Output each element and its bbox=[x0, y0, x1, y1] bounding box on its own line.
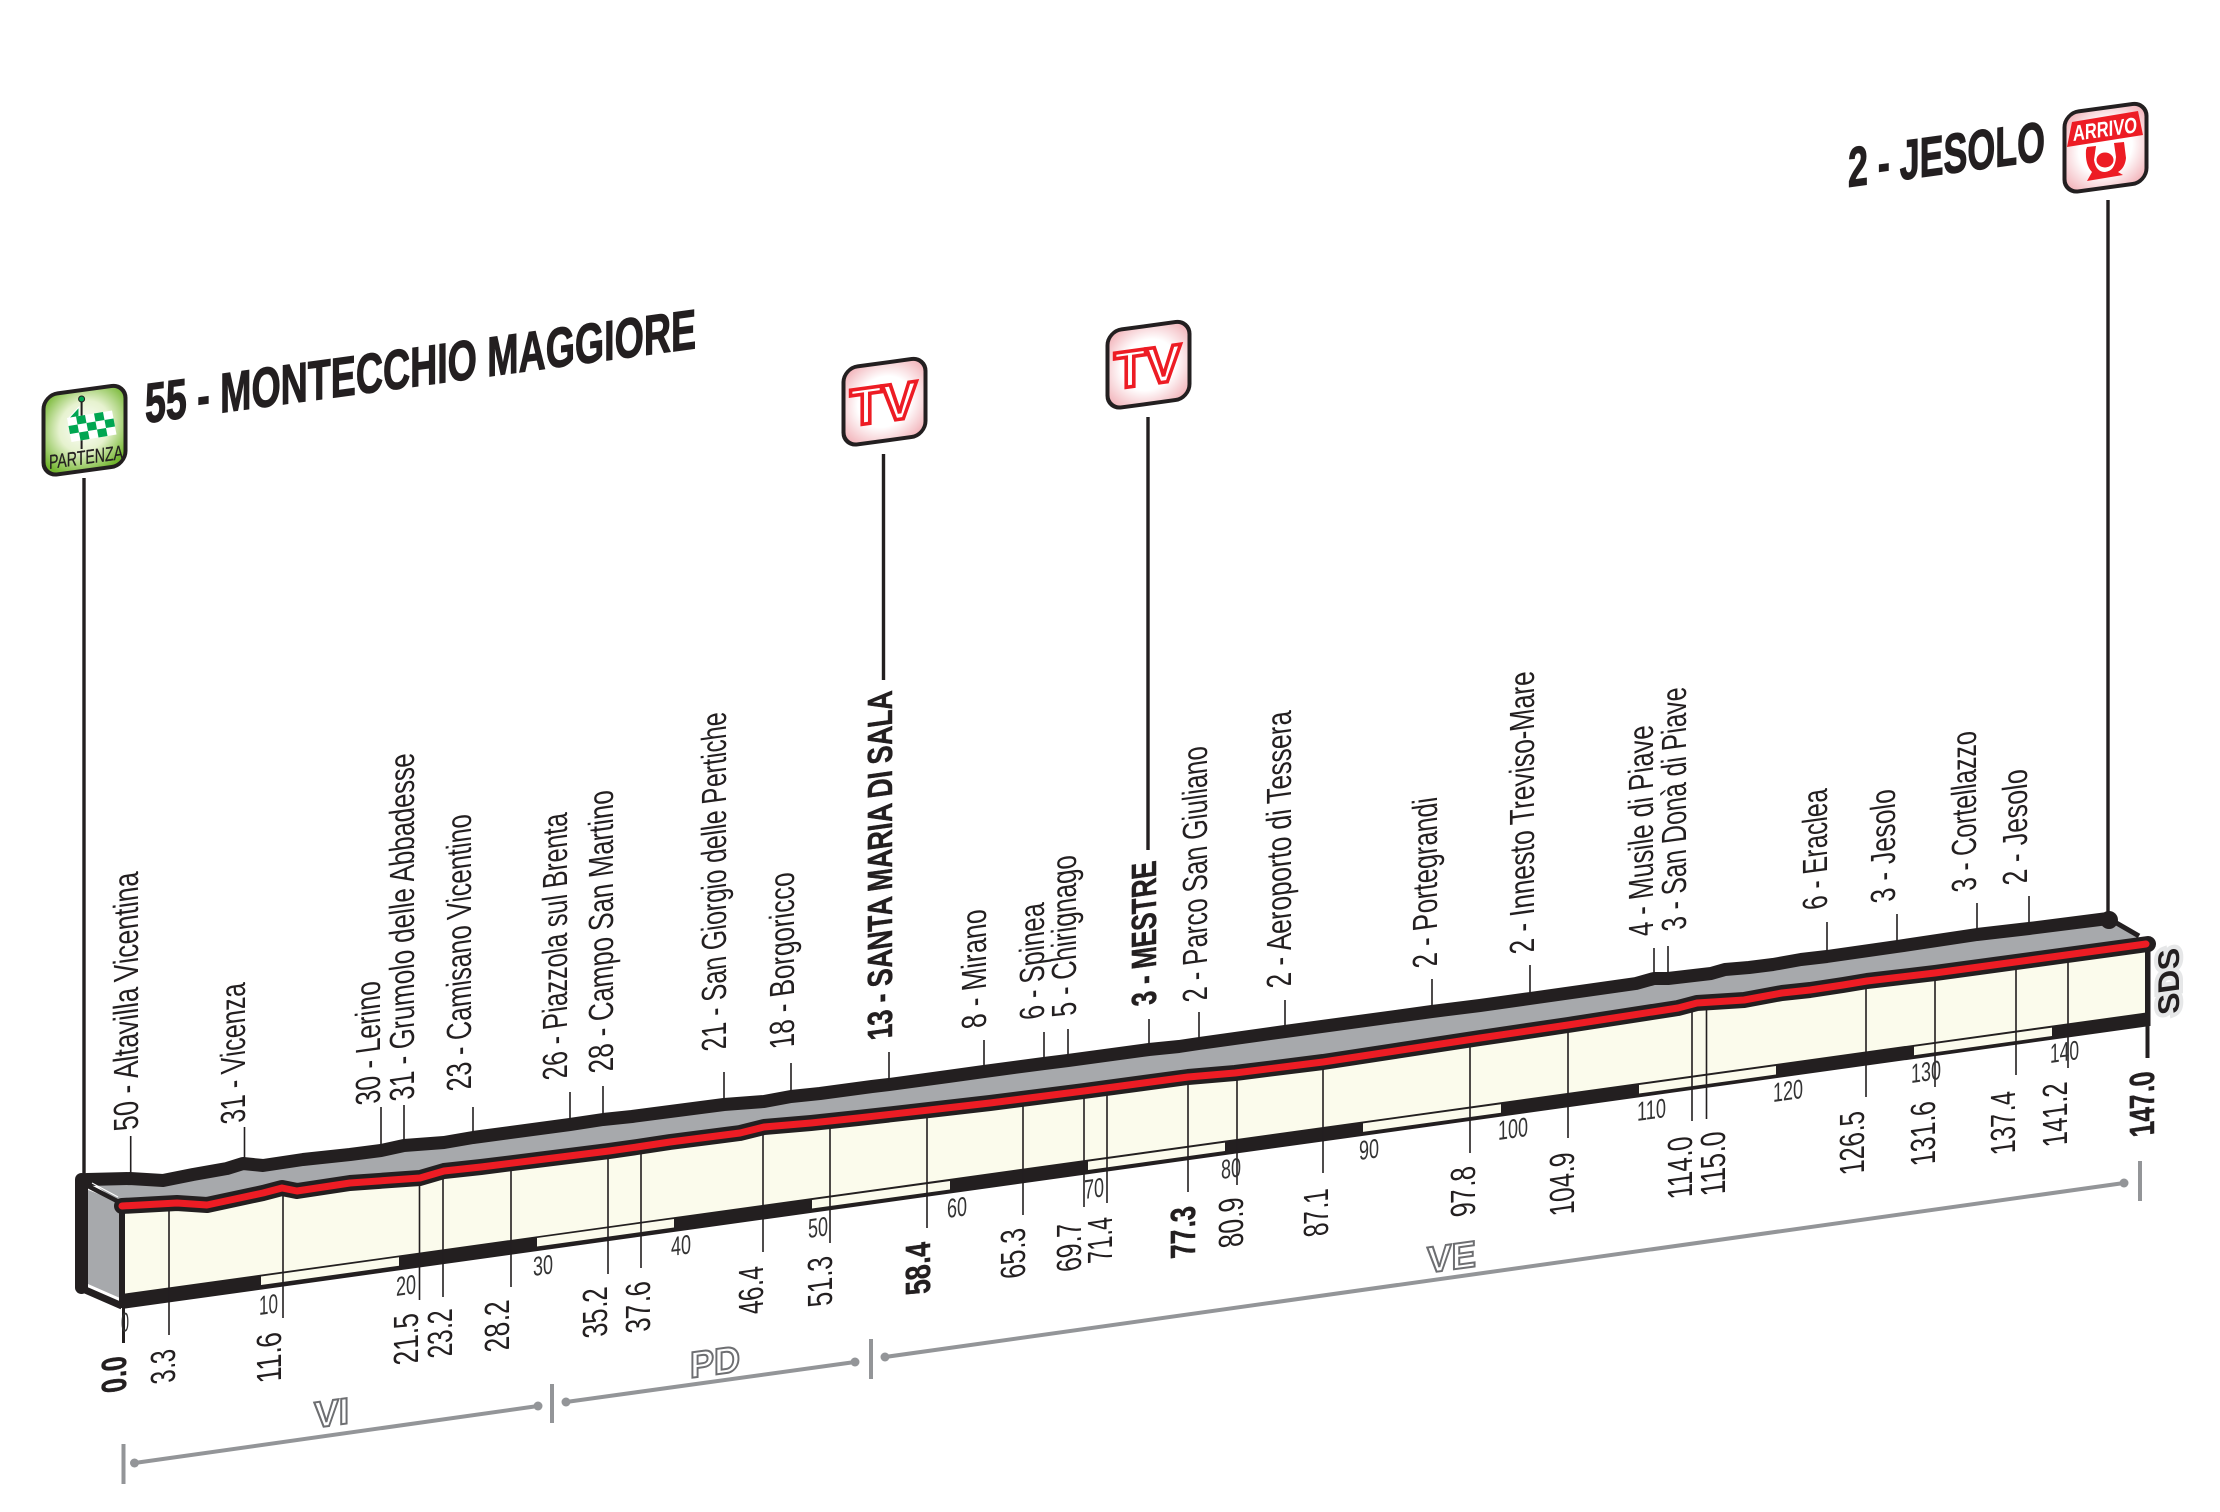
scale 130: 130 bbox=[1911, 1054, 1941, 1089]
label: Parco San Giuliano: 2 - Parco San Giuliano bbox=[1176, 744, 1215, 1004]
km 51.3: 51.3 bbox=[801, 1254, 840, 1309]
scale 70: 70 bbox=[1084, 1171, 1104, 1205]
finish tick below profile bbox=[2146, 1022, 2150, 1058]
town labels bbox=[107, 669, 2035, 1133]
icon: TV Santa Maria di Sala bbox=[844, 357, 926, 446]
profile: stage road block bbox=[75, 911, 2150, 1343]
scale 80: 80 bbox=[1221, 1151, 1241, 1185]
label: Altavilla Vicentina: 50 - Altavilla Vicentina bbox=[107, 870, 146, 1133]
km 80.9: 80.9 bbox=[1212, 1195, 1251, 1250]
scale 60: 60 bbox=[947, 1190, 967, 1224]
distance scale band bbox=[122, 1012, 2150, 1309]
scale 90: 90 bbox=[1359, 1132, 1379, 1166]
label: Grumolo delle Abbadesse: 31 - Grumolo delle Abbadesse bbox=[383, 751, 422, 1103]
SDS mark: SDS bbox=[2153, 946, 2186, 1017]
separators bbox=[124, 1161, 2140, 1484]
bracket: VI bbox=[130, 1389, 542, 1468]
province brackets bbox=[124, 1161, 2140, 1484]
bracket: VI: VI bbox=[314, 1389, 349, 1436]
label: Mirano: 8 - Mirano bbox=[955, 907, 994, 1031]
label: Borgoricco: 18 - Borgoricco bbox=[763, 870, 802, 1051]
label: Spinea: 6 - Spinea bbox=[1013, 901, 1052, 1022]
label: San Giorgio delle Pertiche: 21 - San Giorgio delle Pertiche bbox=[695, 710, 734, 1053]
arrivo text: ARRIVO bbox=[2073, 112, 2137, 146]
km 46.4: 46.4 bbox=[732, 1264, 771, 1317]
km 77.3: 77.3 bbox=[1164, 1204, 1203, 1260]
label: Jesolo: 3 - Jesolo bbox=[1864, 787, 1903, 905]
label: Campo San Martino: 28 - Campo San Martino bbox=[582, 788, 621, 1075]
km 35.2: 35.2 bbox=[576, 1285, 615, 1340]
gray road surface bbox=[87, 917, 2148, 1206]
km 23.2: 23.2 bbox=[421, 1307, 460, 1360]
km 58.4: 58.4 bbox=[899, 1240, 938, 1297]
km 104.9: 104.9 bbox=[1543, 1150, 1582, 1218]
label: Innesto Treviso-Mare: 2 - Innesto Treviso-Mare bbox=[1503, 669, 1542, 956]
heading: finish town: 2 - JESOLO bbox=[1848, 109, 2045, 199]
scale numbers bbox=[121, 1034, 2079, 1338]
right end of road bbox=[2100, 911, 2150, 1026]
race route line bbox=[122, 944, 2148, 1206]
km 37.6: 37.6 bbox=[619, 1279, 658, 1335]
km 141.2: 141.2 bbox=[2036, 1080, 2075, 1149]
km 87.1: 87.1 bbox=[1297, 1187, 1336, 1239]
scale 120: 120 bbox=[1773, 1073, 1803, 1108]
descending distance ticks bbox=[124, 955, 2068, 1343]
icon: partenza bbox=[44, 384, 126, 476]
label: Cortellazzo: 3 - Cortellazzo bbox=[1945, 729, 1984, 894]
bracket: PD: PD bbox=[690, 1337, 740, 1386]
icon: arrivo bbox=[2064, 102, 2146, 193]
km 21.5: 21.5 bbox=[387, 1311, 426, 1367]
km 137.4: 137.4 bbox=[1984, 1089, 2023, 1157]
km 28.2: 28.2 bbox=[478, 1298, 517, 1354]
label: Lerino: 30 - Lerino bbox=[349, 979, 388, 1107]
km 114.0: 114.0 bbox=[1661, 1134, 1700, 1201]
label: Mestre: 3 - MESTRE bbox=[1125, 859, 1164, 1008]
heading: start town: 55 - MONTECCHIO MAGGIORE bbox=[145, 297, 696, 435]
icon: TV Mestre bbox=[1108, 320, 1190, 409]
scale 40: 40 bbox=[671, 1228, 691, 1262]
scale 0: 0 bbox=[121, 1306, 129, 1338]
label: Musile di Piave: 4 - Musile di Piave bbox=[1622, 723, 1661, 939]
label: Jesolo (finish): 2 - Jesolo bbox=[1996, 767, 2035, 887]
km 0.0: 0.0 bbox=[95, 1354, 134, 1395]
km 147.0: 147.0 bbox=[2123, 1069, 2162, 1139]
label: Eraclea: 6 - Eraclea bbox=[1796, 787, 1835, 912]
bracket: PD bbox=[562, 1337, 860, 1406]
flag fold bbox=[68, 407, 79, 427]
banner bbox=[2067, 111, 2143, 147]
scale 140: 140 bbox=[2050, 1034, 2079, 1069]
km 3.3: 3.3 bbox=[144, 1347, 183, 1386]
km 97.8: 97.8 bbox=[1444, 1164, 1483, 1219]
label: San Dona di Piave: 3 - San Donà di Piave bbox=[1655, 685, 1694, 933]
back edge of road bbox=[87, 918, 2108, 1180]
km 69.7: 69.7 bbox=[1050, 1220, 1089, 1274]
left side of block bbox=[75, 1173, 125, 1308]
cream front face of profile bbox=[122, 944, 2148, 1296]
bracket: VE bbox=[880, 1178, 2128, 1362]
km 126.5: 126.5 bbox=[1833, 1109, 1872, 1177]
flag pole bbox=[79, 396, 85, 449]
km 11.6: 11.6 bbox=[250, 1330, 289, 1385]
icon: TV Santa Maria di Sala: TV bbox=[850, 371, 917, 438]
icon posts bbox=[84, 200, 2108, 1175]
bracket: VE: VE bbox=[1427, 1232, 1476, 1281]
km 65.3: 65.3 bbox=[994, 1226, 1033, 1281]
label: Camisano Vicentino: 23 - Camisano Vicentino bbox=[440, 812, 479, 1093]
scale 100: 100 bbox=[1498, 1111, 1528, 1146]
label: Portegrandi: 2 - Portegrandi bbox=[1406, 795, 1445, 970]
scale 20: 20 bbox=[396, 1268, 416, 1302]
label: Aeroporto di Tessera: 2 - Aeroporto di Tessera bbox=[1260, 709, 1299, 990]
label: Vicenza: 31 - Vicenza bbox=[214, 981, 253, 1126]
km 71.4: 71.4 bbox=[1081, 1215, 1120, 1265]
town ticks above the road bbox=[131, 896, 2029, 1174]
scale 50: 50 bbox=[808, 1210, 828, 1244]
label: Chirignago: 5 - Chirignago bbox=[1045, 853, 1084, 1019]
icon: TV Mestre: TV bbox=[1114, 334, 1181, 401]
scale 110: 110 bbox=[1637, 1092, 1666, 1127]
scale 30: 30 bbox=[533, 1248, 553, 1282]
km 115.0: 115.0 bbox=[1694, 1129, 1733, 1198]
label: Santa Maria di Sala: 13 - SANTA MARIA DI SALA bbox=[861, 689, 900, 1042]
scale 10: 10 bbox=[259, 1288, 278, 1321]
distance labels bbox=[95, 1069, 2162, 1395]
winner figure bbox=[2086, 142, 2126, 181]
checkered flag bbox=[67, 410, 116, 442]
km 131.6: 131.6 bbox=[1904, 1099, 1943, 1168]
label: Piazzola sul Brenta: 26 - Piazzola sul Brenta bbox=[536, 811, 575, 1082]
partenza label: PARTENZA bbox=[49, 442, 123, 474]
